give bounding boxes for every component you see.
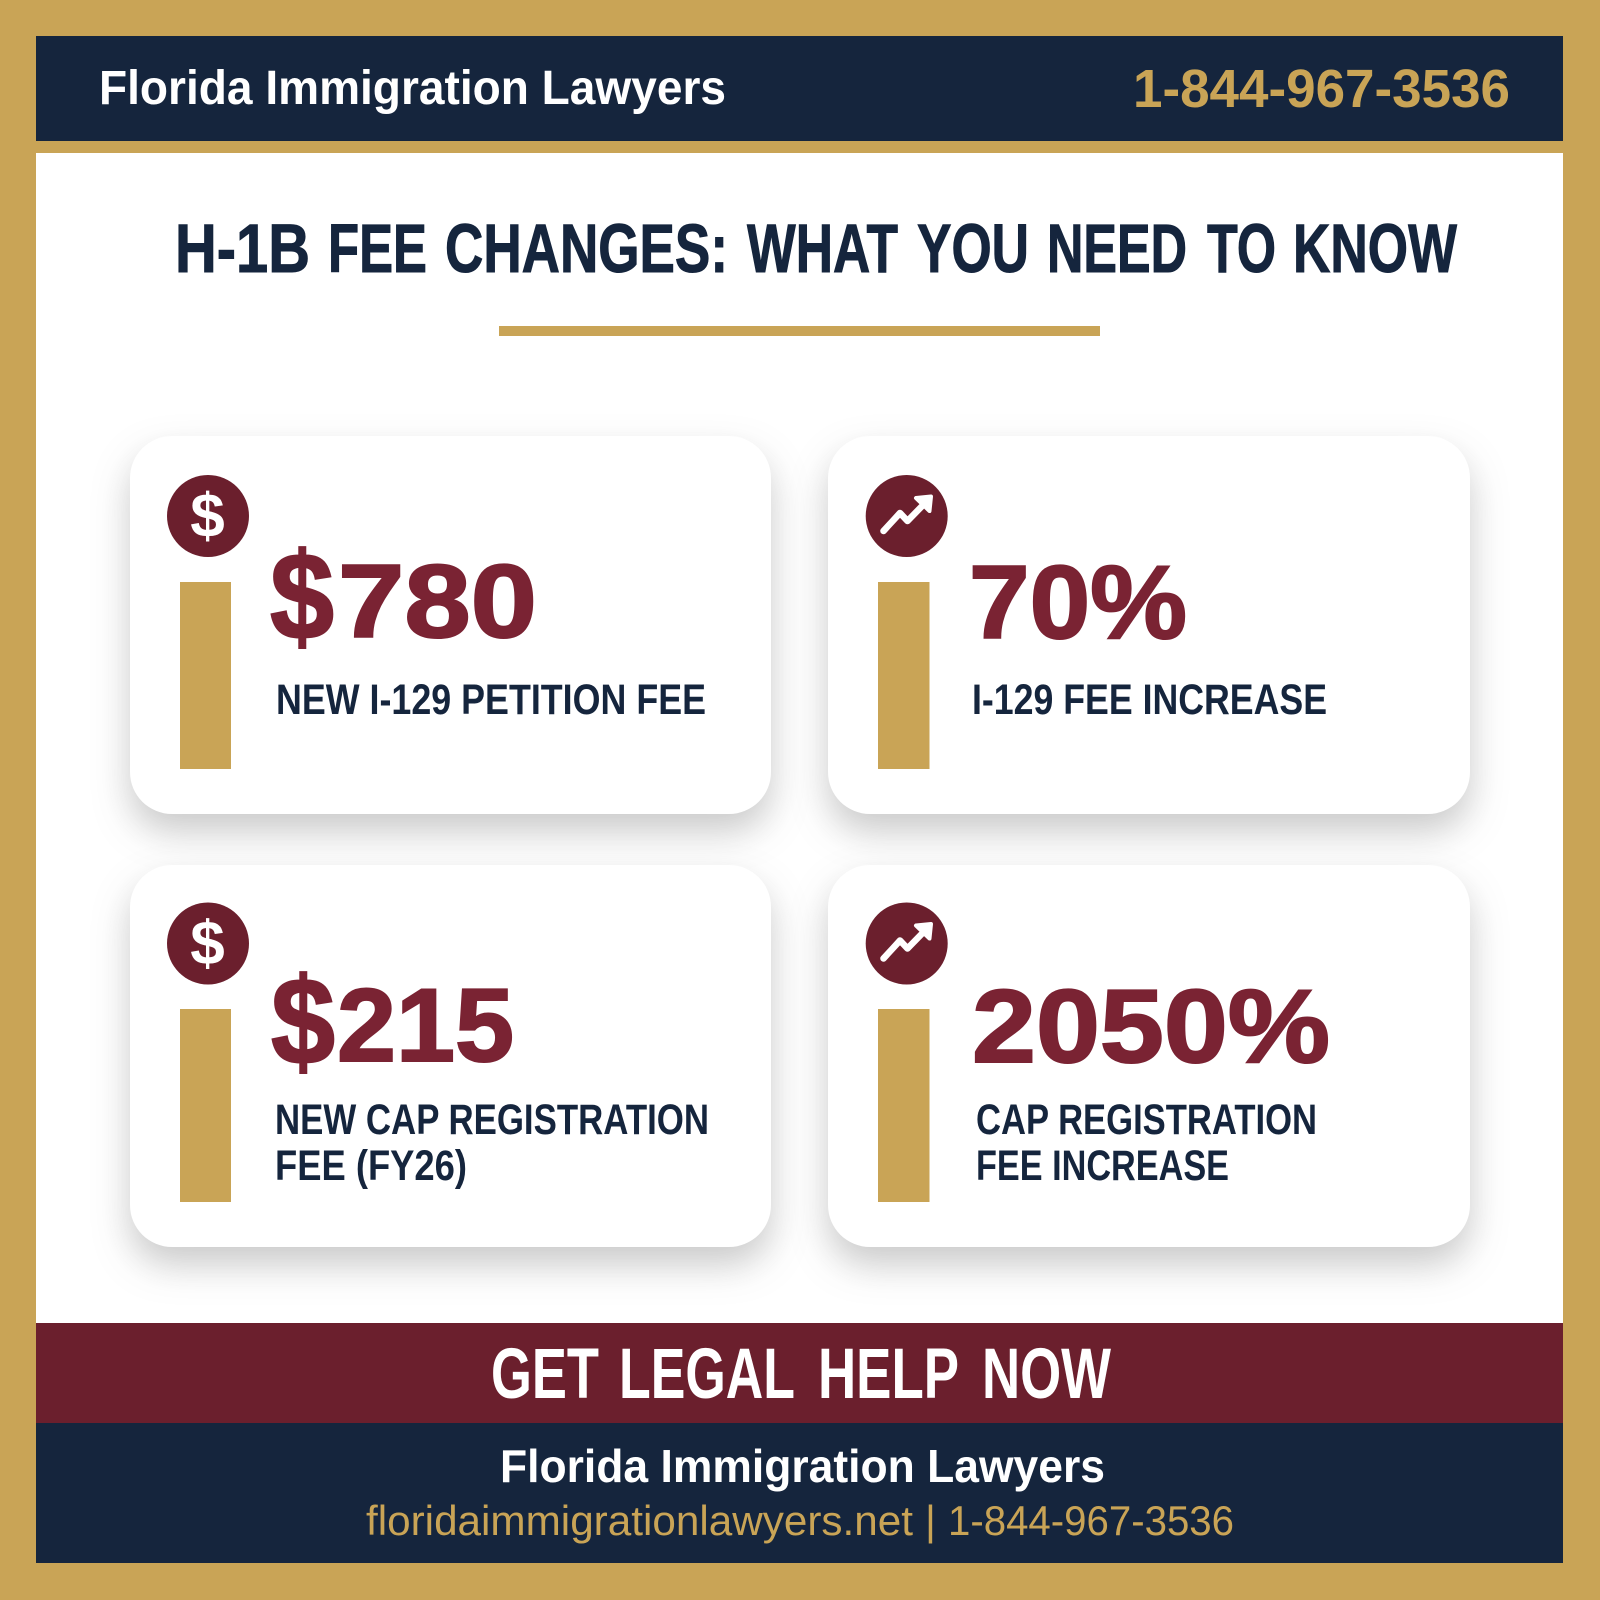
stat label: FEE INCREASE xyxy=(976,1143,1229,1190)
stat label: I-129 FEE INCREASE xyxy=(972,677,1327,724)
stat value: 780 xyxy=(338,544,537,660)
gold bar xyxy=(180,582,231,769)
footer contact line xyxy=(366,1497,1234,1544)
icon: dollar xyxy=(167,902,249,984)
icon: dollar xyxy=(167,475,249,557)
stat label: FEE (FY26) xyxy=(275,1143,467,1190)
card: $215 xyxy=(130,865,771,1247)
title: WHAT xyxy=(747,210,898,287)
stat label xyxy=(976,1097,1317,1190)
title xyxy=(175,210,1458,287)
stat value: $ xyxy=(271,954,335,1091)
footer contact line: floridaimmigrationlawyers.net xyxy=(366,1497,913,1544)
card: 2050% xyxy=(828,865,1470,1247)
call to action banner: HELP xyxy=(818,1335,959,1414)
icon: trend arrow xyxy=(866,475,948,557)
card: 70% xyxy=(828,436,1470,814)
stat label: NEW I-129 PETITION FEE xyxy=(276,677,706,724)
title: TO xyxy=(1207,210,1276,287)
header firm name: Florida Immigration Lawyers xyxy=(99,62,726,115)
title: YOU xyxy=(917,210,1029,287)
call to action banner xyxy=(36,1323,1563,1423)
title: CHANGES: xyxy=(445,210,728,287)
stat value xyxy=(270,529,537,666)
title: NEED xyxy=(1047,210,1187,287)
gold bar xyxy=(878,1009,930,1202)
stat value: 215 xyxy=(337,968,514,1084)
call to action banner: NOW xyxy=(982,1335,1111,1414)
stat label xyxy=(275,1097,709,1190)
stat value: 2050% xyxy=(972,969,1330,1085)
card: $780 xyxy=(130,436,771,814)
icon: trend arrow xyxy=(866,902,948,984)
stat value: 70% xyxy=(969,545,1187,661)
stat value xyxy=(271,954,514,1091)
title divider xyxy=(499,326,1100,336)
footer contact line: | xyxy=(925,1497,936,1544)
stat value: $ xyxy=(270,529,334,666)
call to action banner: LEGAL xyxy=(619,1335,795,1414)
gold bar xyxy=(180,1009,231,1202)
icon: dollar: $ xyxy=(190,482,225,551)
title: H-1B xyxy=(175,210,310,287)
stat label: CAP REGISTRATION xyxy=(976,1097,1317,1144)
title: FEE xyxy=(328,210,427,287)
stat label: NEW CAP REGISTRATION xyxy=(275,1097,709,1144)
header phone number: 1-844-967-3536 xyxy=(1133,59,1510,119)
footer contact line: 1-844-967-3536 xyxy=(948,1497,1234,1544)
title: KNOW xyxy=(1293,210,1458,287)
gold bar xyxy=(878,582,930,769)
footer panel xyxy=(36,1423,1563,1563)
header bar xyxy=(36,36,1563,141)
call to action banner: GET xyxy=(491,1335,599,1414)
footer firm name: Florida Immigration Lawyers xyxy=(500,1440,1105,1492)
icon: dollar: $ xyxy=(190,910,225,978)
